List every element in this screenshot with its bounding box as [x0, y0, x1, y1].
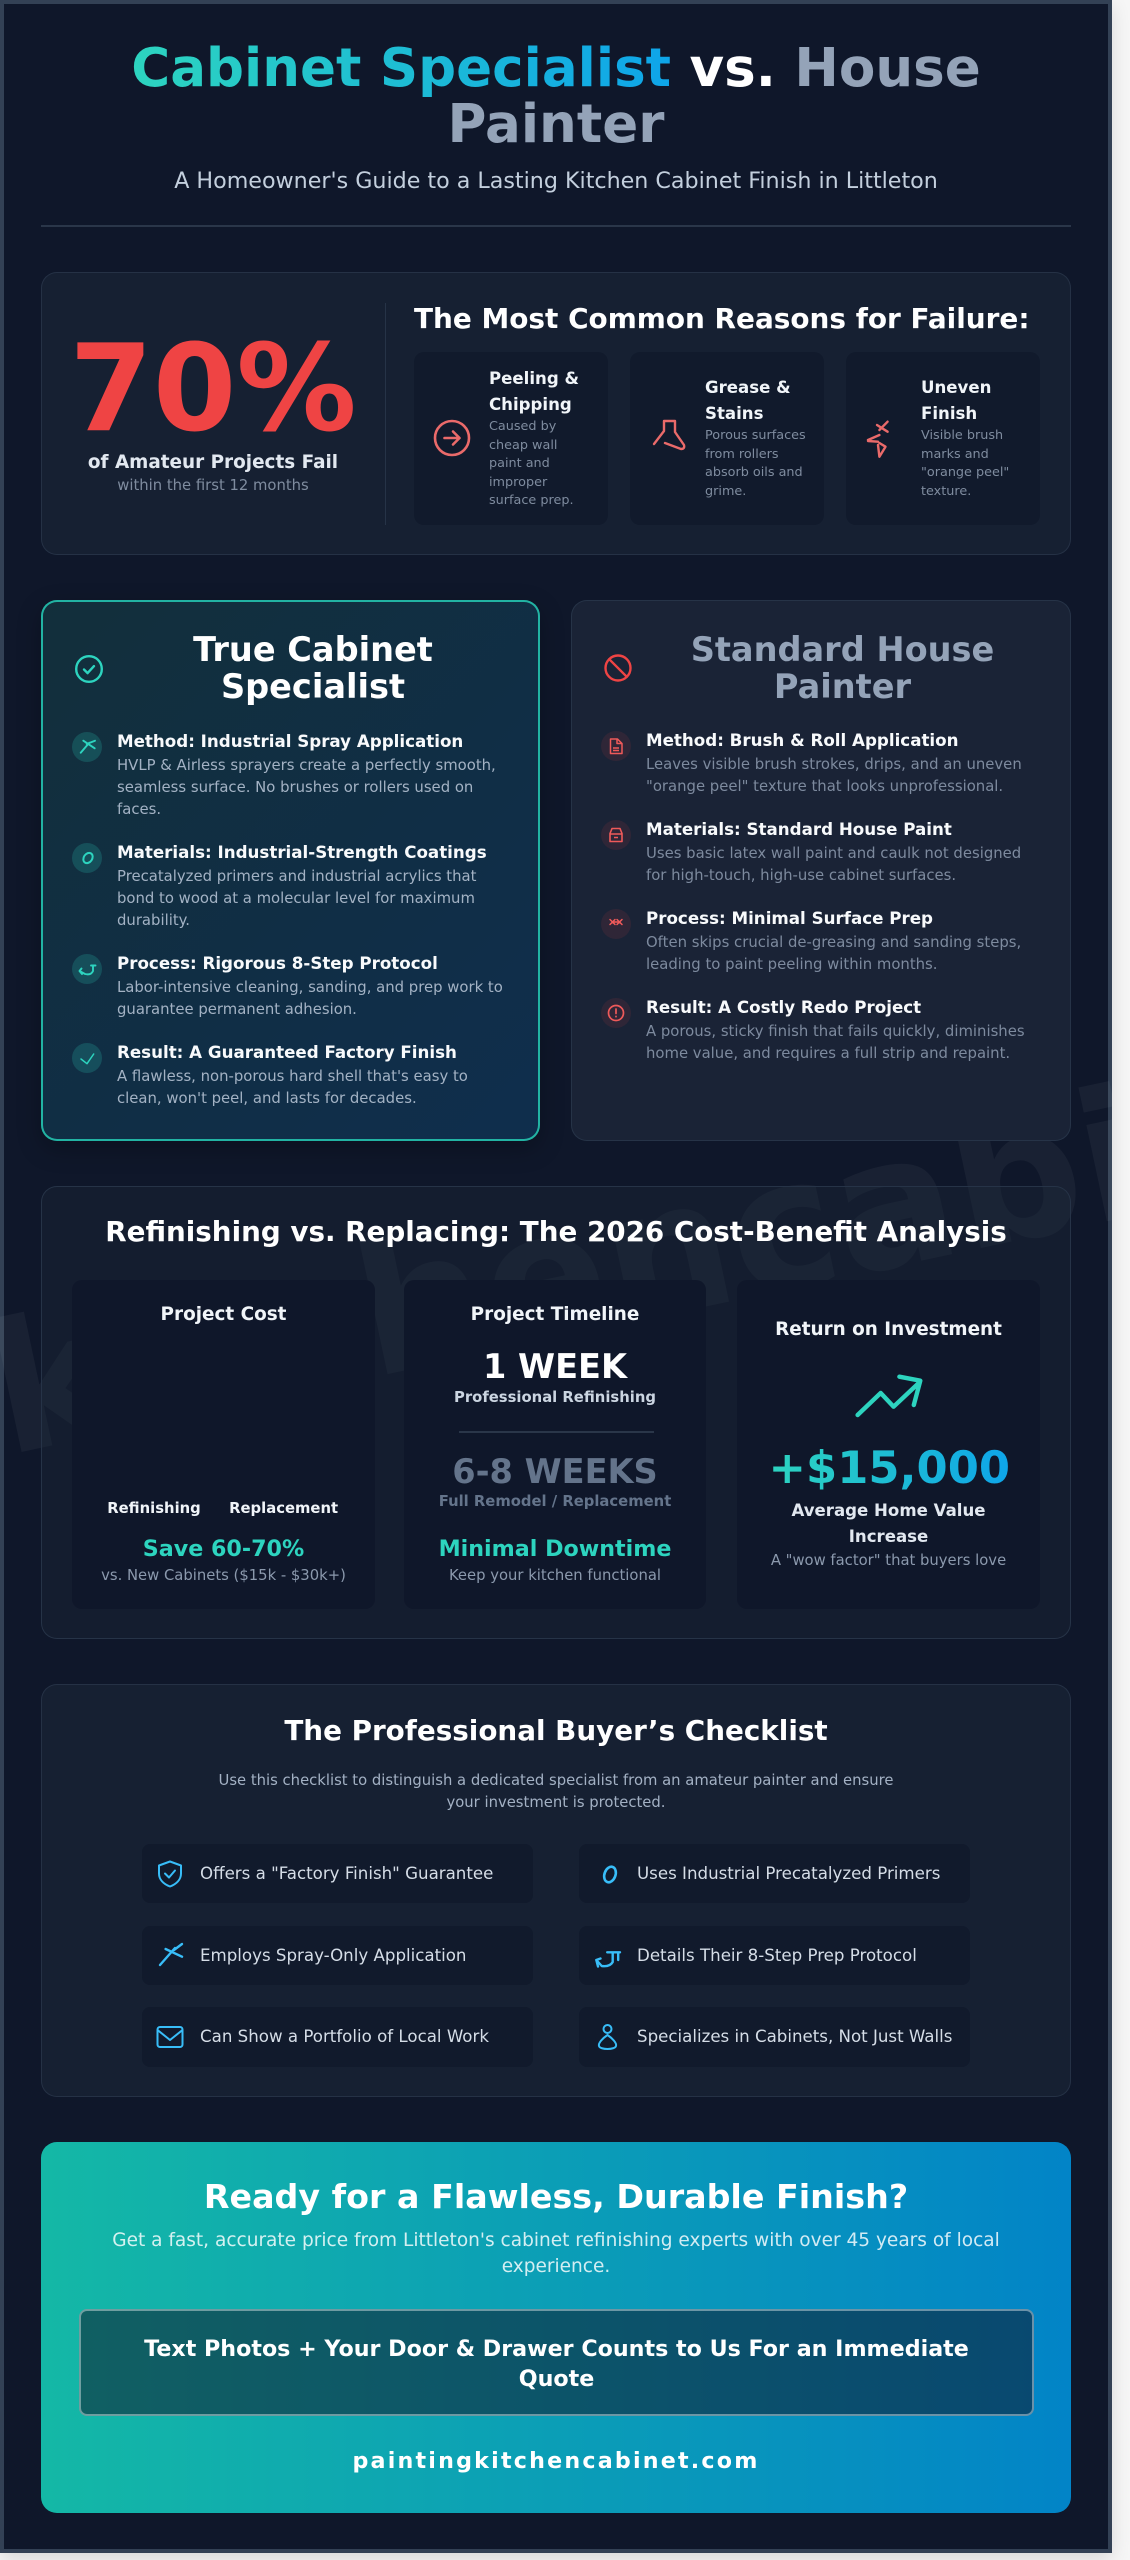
item: materials: [72, 842, 487, 929]
text: [41, 2228, 1071, 2280]
card text: "orange peel": [921, 465, 1009, 480]
button: [79, 2309, 1034, 2416]
icon: box: [601, 820, 631, 850]
replacement duration: 6-8 WEEKS: [452, 1452, 658, 1491]
refinishing label: Professional Refinishing: [454, 1389, 656, 1406]
stat sublabel: within the first 12 months: [117, 477, 309, 494]
card text: Caused by: [489, 419, 556, 434]
chart label: refinishing: Refinishing: [107, 1500, 201, 1517]
card text: improper: [489, 475, 547, 490]
roi label: Average Home Value: [791, 1501, 986, 1520]
checklist item: specialization: [579, 2007, 970, 2067]
icon: document: [601, 731, 631, 761]
heading: Painter: [774, 667, 911, 706]
icon: envelope: [156, 2026, 184, 2048]
card title: Project Timeline: [471, 1304, 639, 1325]
item title: Result: A Guaranteed Factory Finish: [117, 1042, 457, 1062]
savings note: vs. New Cabinets ($15k - $30k+): [101, 1567, 346, 1584]
item text: "orange peel" texture that looks unprofessional.: [646, 777, 1003, 795]
item: method: [72, 731, 496, 818]
heading: Standard House: [691, 630, 994, 669]
card text: paint and: [489, 456, 550, 471]
panel: cost benefit analysis: [41, 1186, 1071, 1639]
heading: [691, 630, 994, 706]
title: Cabinet Specialist vs. House: [131, 37, 981, 99]
item text: guarantee permanent adhesion.: [117, 1000, 357, 1018]
panel: call to action: [41, 2142, 1071, 2513]
item text: Labor-intensive cleaning, sanding, and prep work to: [117, 978, 503, 996]
item text: Often skips crucial de-greasing and sanding steps,: [646, 933, 1021, 951]
item text: leading to paint peeling within months.: [646, 955, 938, 973]
roi note: A "wow factor" that buyers love: [771, 1552, 1006, 1569]
savings figure: Save 60-70%: [143, 1536, 304, 1562]
card title: Stains: [705, 404, 763, 423]
card: peeling and chipping: [414, 352, 608, 525]
icon: hook: [72, 954, 102, 984]
item text: [646, 1022, 1025, 1062]
heading: Refinishing vs. Replacing: The 2026 Cost-Benefit Analysis: [105, 1215, 1007, 1248]
heading: True Cabinet: [193, 630, 433, 669]
icon: person: [598, 2024, 618, 2050]
item title: Method: Industrial Spray Application: [117, 731, 463, 751]
intro text: [218, 1772, 894, 1811]
item text: Offers a "Factory Finish" Guarantee: [200, 1864, 493, 1883]
icon: check circle: [75, 655, 103, 683]
card title: [705, 378, 791, 423]
checklist item: spray: [142, 1926, 533, 1985]
stat: 70 percent of amateur projects fail: [69, 320, 357, 494]
text: Get a fast, accurate price from Littleton's cabinet refinishing experts with over 45 years of local: [112, 2230, 1000, 2251]
item text: home value, and requires a full strip and repaint.: [646, 1044, 1010, 1062]
icon: spray: [158, 1942, 184, 1966]
icon: crossed marks: [601, 909, 631, 939]
item text: [646, 844, 1021, 884]
card title: [489, 369, 579, 414]
roi label: [791, 1501, 986, 1546]
card title: Grease &: [705, 378, 791, 397]
checklist item: guarantee: [142, 1844, 533, 1903]
item text: Uses Industrial Precatalyzed Primers: [637, 1864, 940, 1883]
button: Text Photos + Your Door & Drawer Counts to Us For an Immediate: [144, 2336, 969, 2362]
website: paintingkitchencabinet.com: [352, 2448, 760, 2474]
icon: shield: [158, 1860, 182, 1888]
heading: Ready for a Flawless, Durable Finish?: [204, 2177, 908, 2216]
icon: hook: [595, 1951, 622, 1968]
card text: marks and: [921, 447, 989, 462]
card text: [705, 428, 806, 499]
card text: absorb oils and: [705, 465, 803, 480]
icon: check: [72, 1043, 102, 1073]
item: process: [72, 953, 503, 1018]
card title: Return on Investment: [775, 1319, 1002, 1340]
card text: grime.: [705, 484, 746, 499]
big number: 70%: [69, 320, 357, 459]
panel: true cabinet specialist: [41, 600, 540, 1141]
item text: Can Show a Portfolio of Local Work: [200, 2027, 489, 2046]
intro text: your investment is protected.: [446, 1794, 666, 1811]
subtitle: A Homeowner's Guide to a Lasting Kitchen Cabinet Finish in Littleton: [174, 168, 938, 194]
item text: clean, won't peel, and lasts for decades.: [117, 1089, 417, 1107]
replacement label: Full Remodel / Replacement: [439, 1493, 671, 1510]
heading: Specialist: [221, 667, 405, 706]
item text: [646, 933, 1021, 973]
item text: A porous, sticky finish that fails quickly, diminishes: [646, 1022, 1025, 1040]
panel: failure statistics: [41, 272, 1071, 555]
item title: Materials: Standard House Paint: [646, 819, 952, 839]
checklist item: prep: [579, 1926, 970, 1985]
item text: Specializes in Cabinets, Not Just Walls: [637, 2027, 952, 2046]
icon: drop: [72, 843, 102, 873]
text: experience.: [502, 2256, 610, 2277]
item text: [117, 978, 503, 1018]
item text: Uses basic latex wall paint and caulk not designed: [646, 844, 1021, 862]
item text: [117, 867, 476, 929]
card title: Peeling &: [489, 369, 579, 388]
item text: A flawless, non-porous hard shell that's easy to: [117, 1067, 468, 1085]
icon: trending up: [855, 1374, 922, 1418]
title: [131, 37, 981, 154]
card text: texture.: [921, 484, 971, 499]
downtime note: Keep your kitchen functional: [449, 1567, 661, 1584]
icon: exclamation circle: [601, 998, 631, 1028]
item text: HVLP & Airless sprayers create a perfectly smooth,: [117, 756, 496, 774]
icon: arrow circle: [434, 420, 470, 456]
item: materials: [601, 819, 1021, 884]
button: Quote: [519, 2366, 594, 2392]
icon: drop: [602, 1865, 618, 1884]
checklist item: portfolio: [142, 2007, 533, 2067]
roi label: Increase: [849, 1527, 928, 1546]
item text: seamless surface. No brushes or rollers used on: [117, 778, 473, 796]
card text: Porous surfaces: [705, 428, 806, 443]
item: result: [72, 1042, 468, 1107]
item title: Process: Minimal Surface Prep: [646, 908, 933, 928]
item text: faces.: [117, 800, 161, 818]
item text: Employs Spray-Only Application: [200, 1946, 466, 1965]
card: return on investment: [736, 1280, 1040, 1609]
item text: Leaves visible brush strokes, drips, and an uneven: [646, 755, 1022, 773]
card text: from rollers: [705, 447, 779, 462]
card title: Finish: [921, 404, 977, 423]
roi figure: +$15,000: [768, 1441, 1010, 1494]
item text: durability.: [117, 911, 190, 929]
icon: prohibited: [604, 654, 632, 682]
checklist item: primers: [579, 1844, 970, 1903]
downtime callout: Minimal Downtime: [439, 1536, 671, 1562]
item: process: [601, 908, 1021, 973]
card title: Uneven: [921, 378, 991, 397]
stat label: of Amateur Projects Fail: [88, 452, 338, 472]
intro text: Use this checklist to distinguish a dedicated specialist from an amateur painter and ensure: [218, 1772, 894, 1789]
refinishing duration: 1 WEEK: [483, 1347, 627, 1386]
card: project cost: [72, 1280, 375, 1609]
card: project timeline: [404, 1280, 706, 1609]
card text: cheap wall: [489, 438, 557, 453]
icon: stain flask: [652, 420, 686, 450]
item text: [646, 755, 1022, 795]
item title: Result: A Costly Redo Project: [646, 997, 921, 1017]
card text: surface prep.: [489, 493, 574, 508]
card title: Project Cost: [161, 1304, 286, 1325]
card text: [921, 428, 1009, 499]
card: grease and stains: [630, 352, 824, 525]
card text: [489, 419, 574, 508]
chart label: replacement: Replacement: [229, 1500, 338, 1517]
item: result: [601, 997, 1025, 1062]
icon: spray: [72, 732, 102, 762]
item text: [117, 1067, 468, 1107]
item text: Details Their 8-Step Prep Protocol: [637, 1946, 917, 1965]
title: Painter: [448, 92, 664, 154]
card title: Chipping: [489, 395, 572, 414]
item text: bond to wood at a molecular level for maximum: [117, 889, 475, 907]
item title: Process: Rigorous 8-Step Protocol: [117, 953, 438, 973]
item text: [117, 756, 496, 818]
heading: [193, 630, 433, 706]
item: method: [601, 730, 1022, 795]
panel: standard house painter: [571, 600, 1071, 1141]
item title: Materials: Industrial-Strength Coatings: [117, 842, 487, 862]
icon: broken bolt: [866, 420, 889, 458]
item title: Method: Brush & Roll Application: [646, 730, 958, 750]
heading: The Professional Buyer’s Checklist: [284, 1714, 828, 1747]
item text: for high-touch, high-use cabinet surfaces.: [646, 866, 956, 884]
card text: Visible brush: [921, 428, 1003, 443]
heading: reasons for failure: The Most Common Reasons for Failure:: [414, 302, 1030, 335]
card title: [921, 378, 991, 423]
panel: buyer's checklist: [41, 1684, 1071, 2097]
item text: Precatalyzed primers and industrial acrylics that: [117, 867, 476, 885]
card: uneven finish: [846, 352, 1040, 525]
